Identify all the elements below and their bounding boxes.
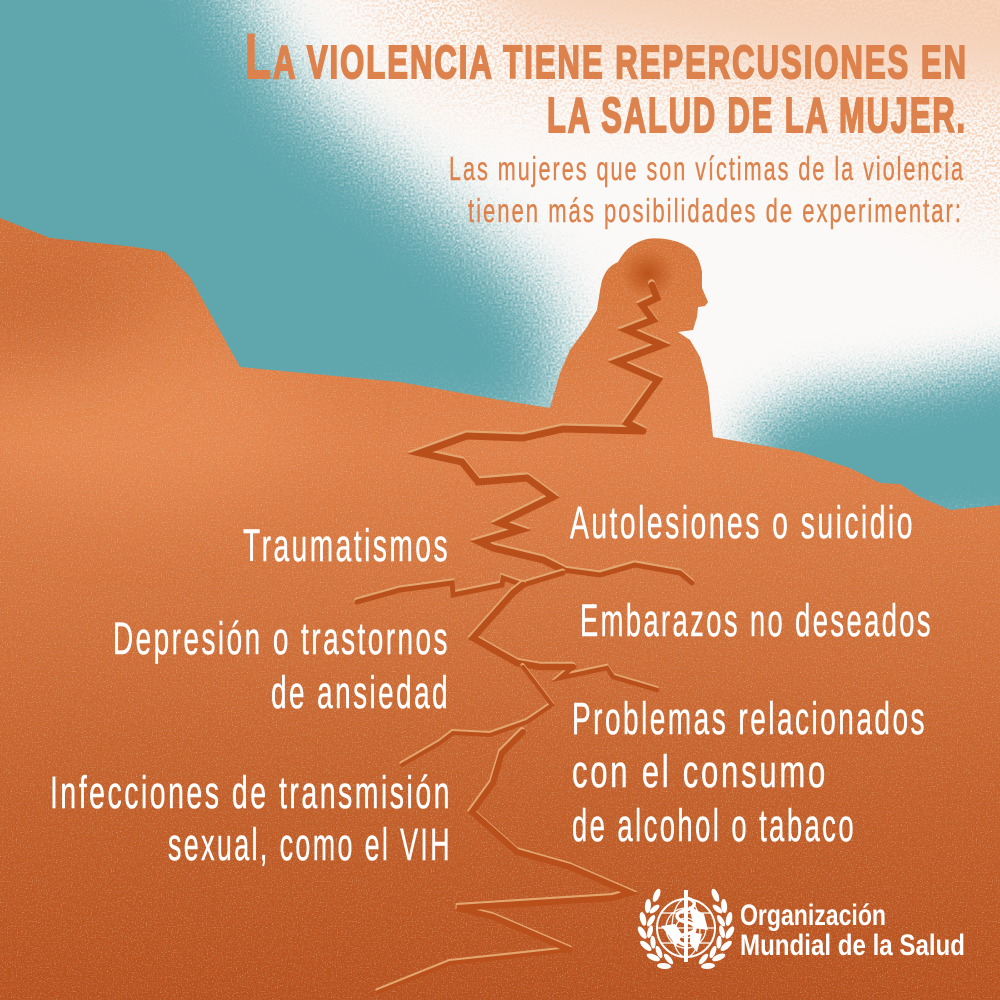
text: organisation name: Organización (740, 899, 886, 932)
icon: WHO emblem (636, 888, 736, 970)
crack: middle section with right branch (472, 583, 657, 690)
crack: lower section to the bottom of the page (378, 730, 630, 992)
icon: bruise on the woman's head (621, 249, 675, 299)
text: left column consequences: sexual, como el VIH (168, 819, 452, 870)
panel: orange land and woman silhouette (0, 218, 1000, 1000)
text: right column consequences (570, 497, 933, 851)
text: left column consequences: Depresión o trastornos (113, 613, 450, 664)
crack: left branch near Traumatismos (356, 571, 563, 602)
text: left column consequences: Infecciones de transmisión (50, 767, 452, 818)
title (245, 22, 968, 143)
text: left column consequences (50, 520, 452, 870)
text: right column consequences: con el consumo (572, 746, 828, 797)
crack: through the woman and across the land (420, 283, 692, 583)
crack: lower left branch (402, 665, 552, 765)
subtitle (449, 150, 965, 229)
text: organisation name (740, 899, 965, 962)
text: left column consequences: Traumatismos (243, 520, 450, 571)
text: left column consequences: de ansiedad (271, 667, 450, 718)
